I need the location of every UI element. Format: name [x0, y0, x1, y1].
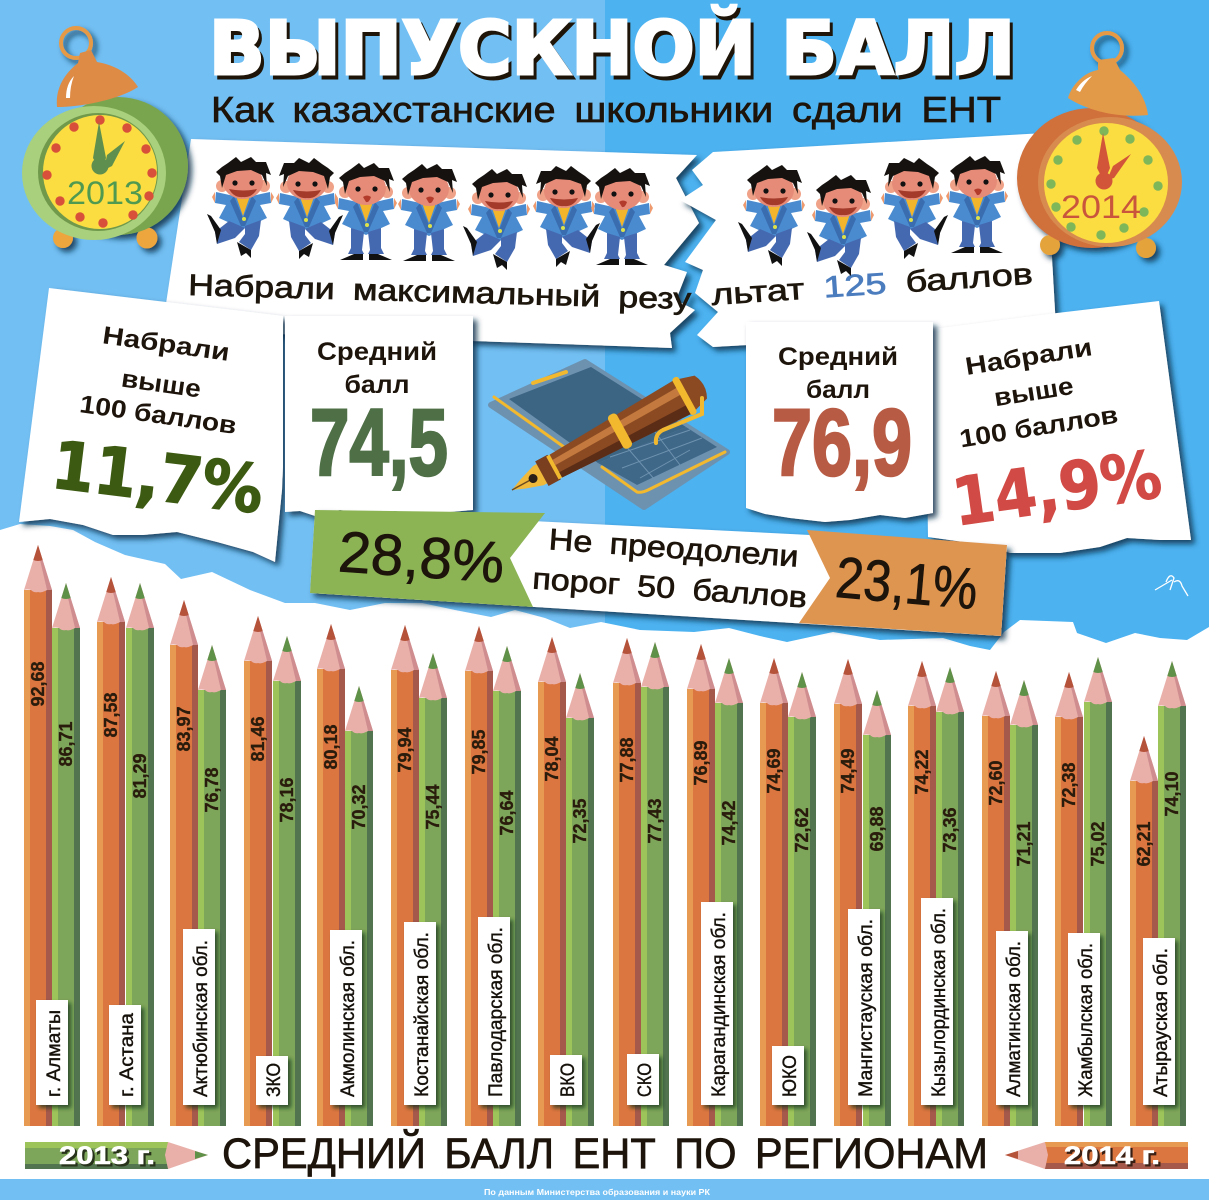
region 9: NKO: 77,88	[617, 737, 637, 783]
region 6: Kostanay	[391, 625, 447, 1126]
region 3: Aktobe	[170, 600, 226, 1126]
region 12: Mangystau: 74,49	[838, 748, 858, 794]
panel: above 100 points 2013	[19, 288, 283, 562]
region 10: Karaganda	[687, 644, 743, 1126]
region 7: Pavlodar: Павлодарская обл.	[486, 927, 507, 1097]
region 7: Pavlodar: 79,85	[469, 729, 489, 775]
region 3: Aktobe: 76,78	[202, 767, 222, 813]
region 8: EKO: 72,35	[570, 798, 590, 844]
region 10: Karaganda: Карагандинская обл.	[709, 912, 730, 1097]
legend: 2014 orange pencil: 2014 г.	[1064, 1142, 1160, 1170]
region 8: EKO: ВКО	[558, 1063, 579, 1097]
legend: 2013 green pencil	[25, 1142, 208, 1172]
region 16: Atyrau	[1130, 661, 1186, 1126]
region 4: WKO	[244, 616, 301, 1126]
region 13: Kyzylorda: Кызылординская обл.	[929, 908, 950, 1097]
value: 14,9%: 14,9%	[948, 436, 1166, 541]
panel: maximum result 2013 piece	[162, 139, 699, 348]
panel: average score 2013	[285, 316, 473, 516]
icon: schoolboys 2014	[738, 156, 1008, 276]
region 7: Pavlodar	[465, 626, 521, 1126]
region 6: Kostanay: 79,94	[395, 727, 415, 773]
region 15: Zhambyl: 75,02	[1088, 821, 1108, 867]
region 11: SKO	[760, 658, 816, 1126]
region 15: Zhambyl: 72,38	[1059, 762, 1079, 808]
subtitle: Как казахстанские школьники сдали ЕНТ	[211, 89, 1001, 130]
region 10: Karaganda: 74,42	[719, 800, 739, 846]
text: did not pass threshold: порог 50 баллов	[531, 562, 808, 615]
region 2: Astana city: г. Астана	[117, 1013, 138, 1097]
chart heading: СРЕДНИЙ БАЛЛ ЕНТ ПО РЕГИОНАМ	[222, 1129, 988, 1178]
icon: schoolboys 2013	[207, 157, 653, 270]
region 5: Akmola: 80,18	[321, 724, 341, 770]
region 13: Kyzylorda: 73,36	[940, 807, 960, 853]
text: above 100 label: выше	[992, 372, 1076, 412]
region 14: Almaty oblast: Алматинская обл.	[1004, 941, 1025, 1097]
value: 74,5: 74,5	[310, 390, 448, 496]
region 14: Almaty oblast	[982, 671, 1038, 1126]
region 14: Almaty oblast: 72,60	[986, 760, 1006, 806]
region 13: Kyzylorda: 74,22	[912, 749, 932, 795]
region 11: SKO: ЮКО	[780, 1055, 801, 1097]
text: did not pass threshold: Не преодолели	[548, 523, 800, 574]
text: above 100 label: Набрали	[101, 321, 231, 367]
legend: 2014 orange pencil: 2014 г.	[1066, 1144, 1162, 1172]
icon: alarm clock 2014: 2014	[1061, 189, 1141, 225]
text: average score label: балл	[344, 371, 410, 399]
text: above 100 label: Набрали	[963, 333, 1094, 381]
region 9: NKO: СКО	[635, 1063, 656, 1097]
region 5: Akmola: 70,32	[349, 784, 369, 830]
icon: alarm clock 2014	[1017, 33, 1182, 258]
region 13: Kyzylorda	[908, 661, 964, 1126]
torn white area behind pencils	[0, 524, 1209, 1179]
icon: tablet and fountain pen	[491, 362, 727, 508]
region 14: Almaty oblast: 71,21	[1014, 821, 1034, 867]
text: average score label: Средний	[317, 338, 437, 366]
value: 28,8%: 28,8%	[336, 519, 506, 596]
region 6: Kostanay: Костанайская обл.	[412, 932, 433, 1097]
text: above 100 label: 100 баллов	[78, 390, 238, 440]
region 11: SKO: 72,62	[792, 807, 812, 853]
region 12: Mangystau: Мангистауская обл.	[856, 919, 877, 1097]
text: above 100 label	[958, 333, 1120, 453]
text: average score label	[317, 338, 437, 399]
value: 23,1%: 23,1%	[833, 545, 980, 622]
panel: above 100 points 2014	[925, 301, 1191, 553]
region 12: Mangystau	[834, 659, 891, 1126]
text: did not pass threshold	[531, 523, 808, 615]
text: maximum result right: льтат 125 баллов	[710, 258, 1034, 312]
region 16: Atyrau: 74,10	[1162, 771, 1182, 817]
panel: below 50 threshold strip	[310, 510, 1007, 636]
region 9: NKO	[613, 638, 669, 1126]
legend: 2013 green pencil: 2013 г.	[61, 1144, 157, 1172]
region 7: Pavlodar: 76,64	[497, 790, 517, 836]
legend: 2014 orange pencil	[1005, 1142, 1188, 1172]
region 16: Atyrau: Атырауская обл.	[1151, 948, 1172, 1097]
bottom source band	[0, 1179, 1209, 1200]
region 5: Akmola	[317, 624, 373, 1126]
text: average score label: Средний	[778, 343, 898, 371]
orange part 2014	[799, 530, 1007, 636]
icon: artist signature	[1155, 576, 1188, 596]
legend: 2013 green pencil: 2013 г.	[59, 1142, 155, 1170]
region 1: Almaty city: г. Алматы	[44, 1010, 65, 1097]
panel: maximum result 2014 piece	[680, 133, 1056, 347]
region 5: Akmola: Акмолинская обл.	[338, 940, 359, 1097]
title: ВЫПУСКНОЙ БАЛЛ	[212, 8, 1018, 96]
bottom source band: По данным Министерства образования и науки РК	[484, 1187, 711, 1197]
region 16: Atyrau: 62,21	[1134, 821, 1154, 867]
chart: pencils with average scores per region	[24, 545, 1186, 1126]
region 4: WKO: ЗКО	[264, 1063, 285, 1097]
panel: average score 2014	[746, 322, 933, 522]
region 12: Mangystau: 69,88	[867, 806, 887, 852]
text: maximum result left: Набрали максимальный резу	[188, 269, 692, 316]
region 4: WKO: 78,16	[277, 777, 297, 823]
value: 11,7%: 11,7%	[48, 427, 268, 529]
region 10: Karaganda: 76,89	[691, 740, 711, 786]
region 1: Almaty city: 86,71	[56, 721, 76, 767]
text: above 100 label: выше	[120, 365, 203, 404]
region 4: WKO: 81,46	[248, 716, 268, 762]
region 8: EKO: 78,04	[542, 736, 562, 782]
region 2: Astana city	[97, 577, 154, 1126]
region 11: SKO: 74,69	[764, 748, 784, 794]
text: above 100 label	[78, 321, 238, 440]
region 15: Zhambyl	[1055, 657, 1112, 1126]
region 8: EKO	[538, 637, 594, 1126]
icon: alarm clock 2013: 2013	[67, 175, 143, 211]
region 6: Kostanay: 75,44	[423, 784, 443, 830]
region 3: Aktobe: Актюбинская обл.	[191, 940, 212, 1097]
title: ВЫПУСКНОЙ БАЛЛ	[209, 4, 1015, 92]
value: 76,9: 76,9	[772, 390, 912, 496]
text: average score label: балл	[806, 376, 870, 404]
region 9: NKO: 77,43	[645, 798, 665, 844]
text: average score label	[778, 343, 898, 404]
region 1: Almaty city: 92,68	[28, 661, 48, 707]
region 3: Aktobe: 83,97	[174, 706, 194, 752]
text: above 100 label: 100 баллов	[958, 401, 1120, 453]
region 2: Astana city: 87,58	[101, 692, 121, 738]
region 2: Astana city: 81,29	[130, 753, 150, 799]
green part 2013	[310, 510, 545, 607]
region 1: Almaty city	[24, 545, 80, 1126]
icon: alarm clock 2013	[22, 28, 188, 248]
region 15: Zhambyl: Жамбылская обл.	[1076, 943, 1097, 1097]
